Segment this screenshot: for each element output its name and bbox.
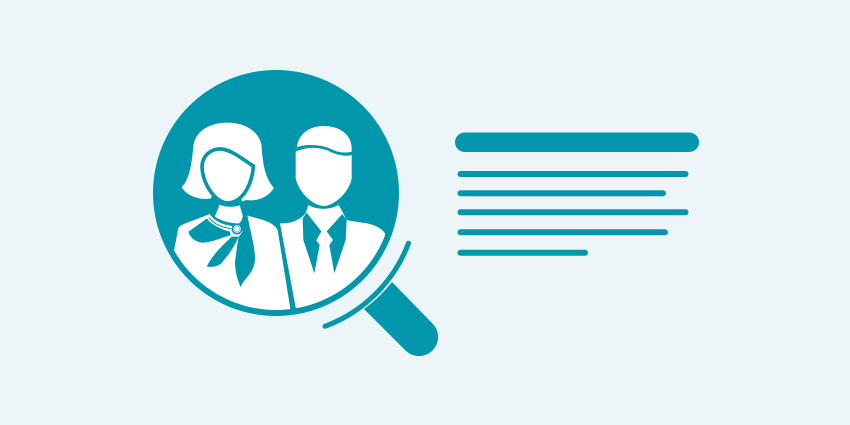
shirt collar [306,205,344,214]
text placeholder lines [455,132,699,256]
man body [280,212,386,308]
woman [174,122,290,310]
woman body [174,214,290,310]
left lapel [303,213,321,273]
man face [296,148,352,206]
line 2 [458,190,666,196]
magnifier lens disc [153,70,399,316]
icon: magnifying glass [153,70,438,356]
infographic illustration [153,70,699,356]
magnifier handle [364,282,438,356]
line 1 [458,171,688,177]
line 3 [458,209,688,215]
woman neck [215,205,243,223]
icon: two people [174,122,386,310]
man hair [297,126,352,153]
brooch inner ring [234,226,240,232]
scarf left tail [207,237,238,267]
scarf collar [188,218,231,243]
woman hair [182,123,274,201]
magnifier outer arc [325,243,408,326]
scarf brooch [232,224,242,234]
scarf right tail [235,215,255,287]
man [280,126,386,308]
right lapel [327,214,347,273]
line 4 [458,229,668,235]
heading bar [455,132,699,152]
woman face [202,149,253,203]
scarf collar line [209,217,231,229]
line 5 [458,250,588,256]
